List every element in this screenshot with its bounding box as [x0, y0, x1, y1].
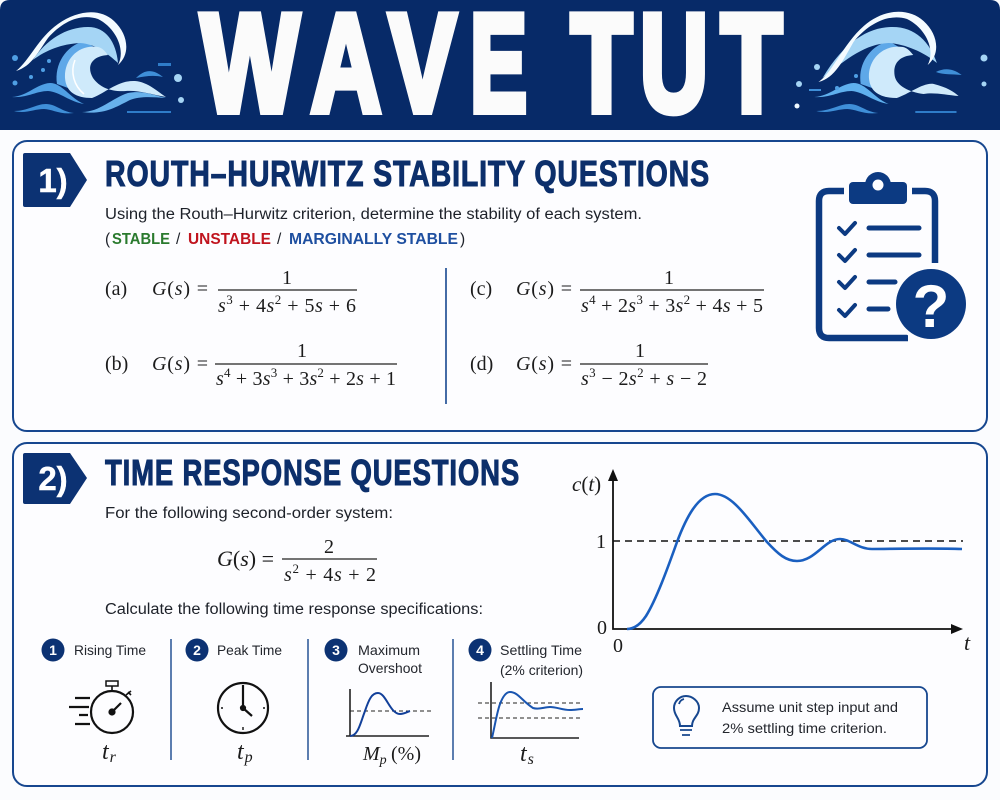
equation (c): s — [628, 295, 636, 317]
transfer function: s — [284, 564, 292, 586]
equation (a): s — [218, 295, 226, 317]
equation (d): s — [581, 368, 589, 390]
equation (a): 2 — [275, 292, 281, 307]
icon: left wave — [12, 12, 184, 113]
symbol: t_s: t — [520, 741, 528, 767]
symbol: t_r: r — [110, 749, 117, 766]
calculation prompt: Calculate the following time response specifications: — [105, 601, 483, 618]
spec: rising time: Rising Time — [74, 642, 146, 658]
transfer function: G(s) = — [217, 546, 274, 571]
heading: Routh-Hurwitz: ROUTH–HURWITZ STABILITY QUESTIONS — [105, 153, 710, 194]
equation (a): (a) — [105, 278, 127, 300]
equation (b): s + 1 — [356, 368, 396, 390]
spec: rising time: 1 — [49, 642, 57, 658]
panel: time response questions — [13, 443, 987, 786]
equation (b): s — [263, 368, 271, 390]
badge: 1): 1) — [38, 162, 68, 199]
equation (b): 4 — [224, 365, 231, 380]
equation (d): 3 — [589, 365, 596, 380]
equation (c): 2 — [684, 292, 690, 307]
equation (a): 1 — [282, 267, 292, 289]
equation (d): s — [629, 368, 637, 390]
equation (d): G(s) = — [516, 353, 572, 375]
icon: clipboard with question mark: ? — [913, 273, 949, 340]
equation (d): − 2 — [596, 368, 628, 390]
stability categories: STABLE — [112, 231, 170, 248]
equation (c): + 4 — [690, 295, 723, 317]
mini chart: settling — [478, 682, 583, 738]
divider between equations — [445, 268, 447, 404]
badge: 2): 2) — [38, 460, 68, 497]
equation (b): (b) — [105, 353, 128, 375]
axis labels: 1 — [596, 531, 606, 553]
transfer function: 2 — [324, 536, 334, 558]
transfer function: + 4 — [300, 564, 333, 586]
spec: rising time — [42, 638, 146, 766]
stability categories: / — [176, 231, 181, 248]
spec: maximum overshoot: 3 — [332, 642, 340, 658]
equation (c): (c) — [470, 278, 492, 300]
transfer function: 2 — [293, 561, 299, 576]
stability categories: ( — [105, 231, 111, 248]
equation (c): 4 — [589, 292, 596, 307]
axis labels: c(t) — [572, 472, 601, 496]
stability categories: / — [277, 231, 282, 248]
spec: settling time — [468, 638, 583, 768]
axis labels: 0 — [597, 617, 607, 639]
equation (c): 3 — [636, 292, 643, 307]
equation (d): (d) — [470, 353, 493, 375]
spec: settling time: (2% criterion) — [500, 662, 583, 678]
symbol: t_p: t — [237, 739, 245, 765]
equation (c): 1 — [664, 267, 674, 289]
equation (a): s — [266, 295, 274, 317]
equation (a): s + 6 — [315, 295, 356, 317]
callout: assumption note: 2% settling time criterion. — [722, 720, 887, 736]
stability categories: ) — [460, 231, 465, 248]
x axis arrow — [951, 624, 963, 634]
equation (b): + 2 — [324, 368, 356, 390]
spec: maximum overshoot — [324, 638, 431, 768]
equation (b): + 3 — [277, 368, 309, 390]
equation (b): s — [309, 368, 317, 390]
badge: 2) — [23, 453, 87, 504]
symbol: M_p (%): (%) — [391, 743, 421, 765]
equation (a) — [105, 267, 357, 317]
icon: light bulb — [674, 696, 699, 735]
badge: 1) — [23, 153, 87, 207]
spec: settling time: Settling Time — [500, 642, 582, 658]
stability categories — [105, 231, 465, 248]
mini chart: overshoot — [346, 689, 431, 736]
symbol: M_p (%): p — [379, 753, 387, 768]
equation (c): G(s) = — [516, 278, 572, 300]
equation (c): + 3 — [643, 295, 675, 317]
equation (b): 2 — [317, 365, 324, 380]
equation (c): s + 5 — [723, 295, 763, 317]
equation (c): s — [581, 295, 589, 317]
symbol: t_p: p — [244, 749, 254, 766]
equation (b): 1 — [297, 340, 307, 362]
equation (a): + 4 — [233, 295, 266, 317]
equation (a): + 5 — [282, 295, 314, 317]
axis labels — [572, 472, 971, 657]
spec: peak time: Peak Time — [217, 642, 282, 658]
transfer function: s + 2 — [334, 564, 376, 586]
spec: settling time: 4 — [476, 642, 484, 658]
stability categories: MARGINALLY STABLE — [289, 231, 458, 248]
equation (d): s − 2 — [666, 368, 707, 390]
equation (c): s — [676, 295, 684, 317]
instruction text: Using the Routh–Hurwitz criterion, determine the stability of each system. — [105, 206, 642, 223]
stability categories: UNSTABLE — [188, 231, 271, 248]
equation (d): 1 — [635, 340, 645, 362]
equation (a): 3 — [226, 292, 233, 307]
spec: peak time: 2 — [193, 642, 201, 658]
title — [201, 0, 782, 141]
callout: assumption note: Assume unit step input and — [722, 699, 898, 715]
icon: clock — [218, 683, 268, 733]
icon: clipboard with question mark — [819, 172, 970, 343]
heading: time response: TIME RESPONSE QUESTIONS — [105, 452, 520, 493]
equation (d): 2 — [637, 365, 644, 380]
callout: assumption note — [653, 687, 927, 748]
chart: step response c(t) — [572, 469, 971, 657]
panel: Routh-Hurwitz stability questions — [13, 141, 987, 431]
symbol: t_r: t — [102, 739, 110, 765]
equation (b): G(s) = — [152, 353, 208, 375]
banner — [0, 0, 1000, 141]
intro text: For the following second-order system: — [105, 505, 393, 522]
symbol: t_s: s — [528, 751, 535, 768]
axis labels: t — [964, 630, 971, 655]
equation (c) — [470, 267, 764, 317]
equation (c): + 2 — [596, 295, 628, 317]
response curve — [627, 494, 962, 629]
spec: maximum overshoot: Maximum — [358, 642, 420, 658]
equation (b) — [105, 340, 397, 390]
equation (d) — [470, 340, 708, 390]
icon: right wave — [794, 12, 988, 113]
equation (d): + — [644, 368, 666, 390]
equation (a): G(s) = — [152, 278, 208, 300]
spec: peak time — [186, 638, 282, 766]
axis labels: 0 — [613, 635, 623, 657]
y axis arrow — [608, 469, 618, 481]
equation (b): s — [216, 368, 224, 390]
symbol: M_p (%): M — [362, 743, 381, 765]
equation (b): + 3 — [231, 368, 263, 390]
transfer function — [217, 536, 377, 586]
equation (b): 3 — [271, 365, 277, 380]
spec: maximum overshoot: Overshoot — [358, 660, 422, 676]
icon: stopwatch — [69, 681, 133, 733]
